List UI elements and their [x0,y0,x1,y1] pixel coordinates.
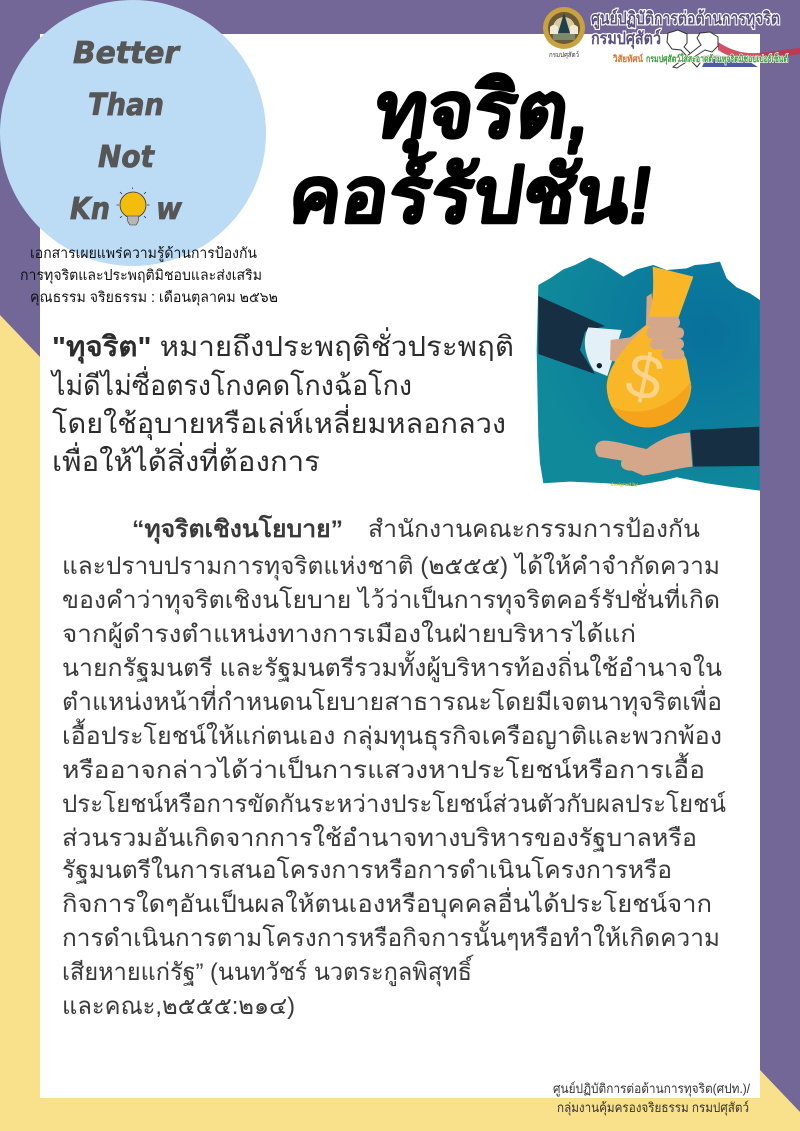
document description [20,245,278,306]
body paragraph: กิจการใดๆอันเป็นผลให้ตนเองหรือบุคคลอื่นได้ประโยชน์จาก [62,887,712,919]
body paragraph: สำนักงานคณะกรรมการป้องกัน [368,516,700,543]
body paragraph: ส่วนรวมอันเกิดจากการใช้อำนาจทางบริหารของรัฐบาลหรือ [62,824,697,852]
body paragraph: และปราบปรามการทุจริตแห่งชาติ (๒๕๕๕) ได้ให้คำจำกัดความ [62,552,720,581]
title [284,66,659,239]
icon: department seal [543,7,585,59]
icon: crossed arms [667,30,718,68]
body paragraph: เสียหายแก่รัฐ” (นนทวัชร์ นวตระกูลพิสุทธิ์ [62,954,474,987]
definition paragraph: ไม่ดีไม่ซื่อตรงโกงคดโกงฉ้อโกง [50,366,412,401]
body paragraph [62,514,726,1020]
document description: เอกสารเผยแพร่ความรู้ด้านการป้องกัน [30,245,257,262]
badge: Better Than Not Know: Not [98,140,156,175]
body paragraph: หรืออาจกล่าวได้ว่าเป็นการแสวงหาประโยชน์หรือการเอื้อ [62,752,705,784]
torn paper backdrop [537,257,760,491]
title: ทุจริต, [369,66,597,158]
lower hand [595,433,692,476]
source credit [553,1081,750,1116]
body paragraph: รัฐมนตรีในการเสนอโครงการหรือการดำเนินโครงการหรือ [62,856,672,884]
badge: Better Than Not Know: Better [73,36,181,71]
illustration: money bag handover [537,257,760,491]
body paragraph: ของคำว่าทุจริตเชิงนโยบาย ไว้ว่าเป็นการทุจริตคอร์รัปชั่นที่เกิด [62,583,720,615]
body paragraph: นายกรัฐมนตรี และรัฐมนตรีรวมทั้งผู้บริหารท้องถิ่นใช้อำนาจใน [62,650,722,683]
body paragraph: จากผู้ดำรงตำแหน่งทางการเมืองในฝ่ายบริหารได้แก่ [62,620,636,649]
title: คอร์รัปชั่น! [284,141,659,239]
icon: light bulb [116,188,150,225]
icon: flag ribbon [702,42,800,67]
money bag [607,267,693,427]
badge: Better Than Not Know: w [156,192,182,227]
body paragraph: “ทุจริตเชิงนโยบาย” [132,514,343,545]
body paragraph: การดำเนินการตามโครงการหรือกิจการนั้นๆหรือทำให้เกิดความ [62,920,720,952]
definition paragraph: "ทุจริต" หมายถึงประพฤติชั่วประพฤติ [52,327,514,364]
header vision line: วิสัยทัศน์ [612,53,643,65]
body paragraph: ตำแหน่งหน้าที่กำหนดนโยบายสาธารณะโดยมีเจตนาทุจริตเพื่อ [62,685,722,717]
definition paragraph: โดยใช้อุบายหรือเล่ห์เหลี่ยมหลอกลวง [52,404,506,441]
lower arm [690,427,759,467]
badge: Better Than Not Know: Kn [70,192,110,227]
document description: การทุจริตและประพฤติมิชอบและส่งเสริม [20,268,262,284]
header logo block [543,7,800,68]
definition paragraph: เพื่อให้ได้สิ่งที่ต้องการ [52,442,320,477]
body paragraph: ประโยชน์หรือการขัดกันระหว่างประโยชน์ส่วนตัวกับผลประโยชน์ [62,790,726,818]
icon: department seal: กรมปศุสัตว์ [549,51,579,59]
document description: คุณธรรม จริยธรรม : เดือนตุลาคม ๒๕๖๒ [30,289,278,306]
upper arm [538,296,605,374]
shirt cuff [585,327,622,376]
body paragraph: เอื้อประโยชน์ให้แก่ตนเอง กลุ่มทุนธุรกิจเครือญาติและพวกพ้อง [62,718,722,751]
header organisation name: กรมปศุสัตว์ [591,28,661,49]
source credit: กลุ่มงานคุ้มครองจริยธรรม กรมปศุสัตว์ [557,1100,749,1116]
giving hand [610,293,653,363]
source credit: ศูนย์ปฏิบัติการต่อต้านการทุจริต(ศปท.)/ [553,1081,750,1097]
header vision line [612,52,788,65]
watermark: designed by [611,482,638,487]
badge: Better Than Not Know [0,0,266,266]
badge: Better Than Not Know: Than [88,88,164,123]
header organisation name [591,8,780,49]
fingers [646,317,684,359]
dollar sign: $ [620,339,669,415]
definition paragraph [50,327,514,477]
body paragraph: และคณะ,๒๕๕๕:๒๑๔) [62,993,295,1020]
